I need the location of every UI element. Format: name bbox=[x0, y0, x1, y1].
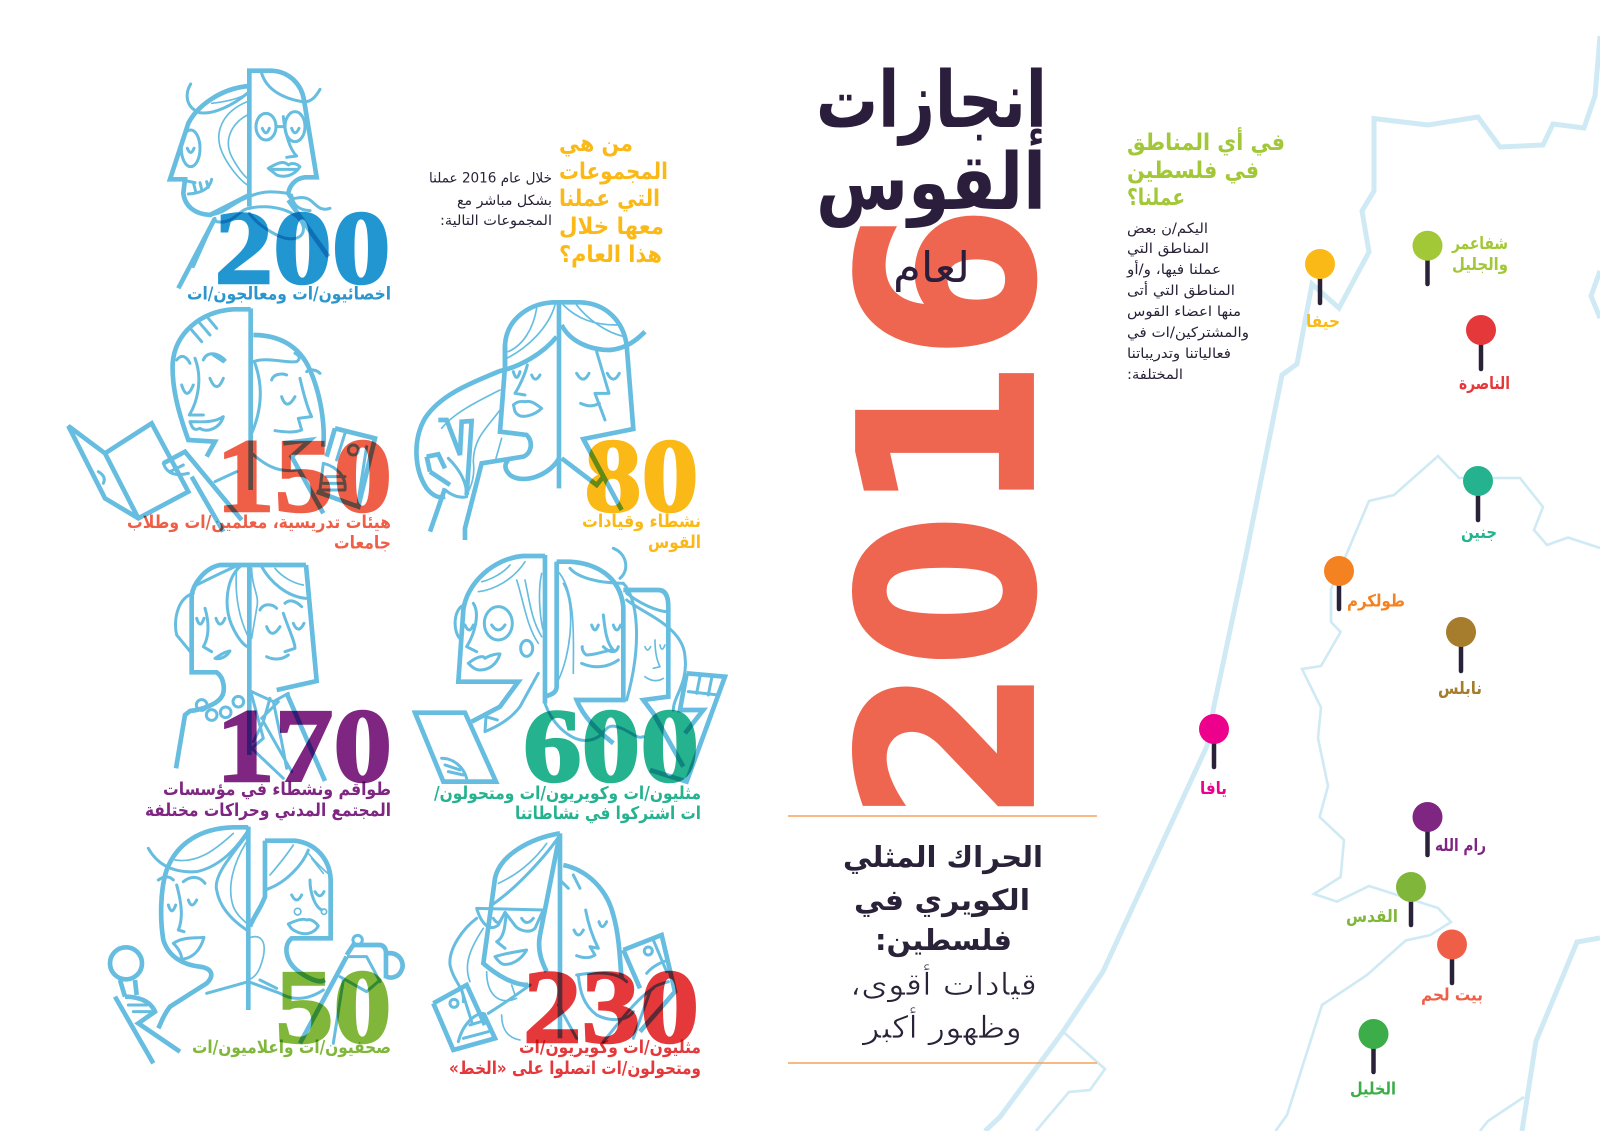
illustration: two faces with sunglasses and phones bbox=[433, 833, 675, 1050]
map of Palestine outline bbox=[985, 36, 1600, 1131]
panel: 50 journalists bbox=[110, 827, 403, 1065]
intro text: groups: المجموعات التالية: bbox=[440, 213, 552, 229]
number: 80: 80 bbox=[584, 417, 698, 534]
pin: Hebron: الخليل bbox=[1350, 1080, 1396, 1100]
number: 200: 200 bbox=[214, 189, 390, 306]
paragraph: regions intro: المختلفة: bbox=[1127, 367, 1183, 383]
pin: Shefa-Amr and Galilee: شفاعمر bbox=[1451, 234, 1508, 254]
heading: in which regions: في فلسطين bbox=[1127, 158, 1259, 184]
intro text: groups: بشكل مباشر مع bbox=[457, 193, 552, 209]
pin: Haifa bbox=[1305, 249, 1340, 332]
illustration: two faces with peace sign bbox=[416, 302, 645, 540]
label: hotline callers: مثليون/ات وكويريون/ات bbox=[519, 1038, 701, 1058]
illustration: two faces with microphone and coffee pot bbox=[110, 827, 403, 1063]
heading: in which regions: في أي المناطق bbox=[1127, 126, 1285, 156]
subtitle block: فلسطين: bbox=[875, 923, 1012, 957]
title: القوس bbox=[816, 138, 1046, 228]
number: 150: 150 bbox=[216, 417, 392, 534]
paragraph: regions intro bbox=[1126, 221, 1249, 383]
label: teaching staff: هيئات تدريسية، معلمين/ات وطلاب bbox=[127, 513, 391, 533]
number: 170: 170 bbox=[216, 687, 392, 804]
heading: who did we work with: هذا العام؟ bbox=[559, 242, 662, 268]
pin: Jerusalem: القدس bbox=[1346, 907, 1398, 927]
pin: Ramallah: رام الله bbox=[1435, 836, 1486, 856]
heading: in which regions bbox=[1127, 126, 1285, 211]
panel: 200 specialists and therapists bbox=[170, 71, 391, 306]
subtitle block: الحراك المثلي bbox=[843, 840, 1043, 874]
paragraph: regions intro: عملنا فيها، و/أو bbox=[1126, 260, 1221, 278]
subtitle block: وظهور أكبر bbox=[861, 1007, 1022, 1046]
big year 2016: 2016 bbox=[811, 206, 1089, 822]
subtitle block bbox=[788, 816, 1097, 1063]
heading: who did we work with: المجموعات bbox=[559, 159, 668, 185]
label: staff bbox=[145, 780, 391, 821]
number: 600: 600 bbox=[523, 687, 699, 804]
illustration: two faces with book and phone bbox=[68, 308, 375, 532]
pin: Ramallah bbox=[1412, 802, 1486, 856]
pin: Tulkarm bbox=[1324, 556, 1405, 612]
label: specialists: اخصائيون/ات ومعالجون/ات bbox=[187, 284, 391, 304]
paragraph: regions intro: منها اعضاء القوس bbox=[1127, 304, 1241, 320]
intro text: groups: خلال عام 2016 عملنا bbox=[429, 170, 552, 186]
label: participants: ات اشتركوا في نشاطاتنا bbox=[515, 804, 701, 824]
label: activists: نشطاء وقيادات bbox=[582, 512, 701, 532]
panel: 230 hotline callers bbox=[433, 833, 701, 1079]
pin: Jerusalem bbox=[1346, 872, 1426, 927]
label: staff: المجتمع المدني وحراكات مختلفة bbox=[145, 801, 391, 821]
pin: Jenin: جنين bbox=[1461, 523, 1497, 543]
paragraph: regions intro: المناطق التي bbox=[1127, 241, 1209, 257]
title bbox=[816, 56, 1047, 228]
illustration: two faces with glasses bbox=[170, 71, 330, 288]
label: participants: مثليون/ات وكويريون/ات ومتحولون/ bbox=[434, 784, 701, 804]
pin: Shefa-Amr and Galilee bbox=[1412, 231, 1508, 284]
panel: 80 activists and leaders bbox=[416, 302, 701, 553]
label: teaching staff: جامعات bbox=[334, 534, 391, 554]
label: activists: القوس bbox=[648, 533, 701, 553]
heading: who did we work with: من هي bbox=[559, 131, 633, 157]
pin: Hebron bbox=[1350, 1019, 1396, 1100]
intro text: groups bbox=[429, 170, 552, 229]
number: 230: 230 bbox=[523, 948, 699, 1065]
heading: who did we work with: معها خلال bbox=[559, 214, 664, 240]
pin: Bethlehem: بيت لحم bbox=[1421, 986, 1483, 1006]
number: 50: 50 bbox=[276, 948, 392, 1065]
pin: Jaffa: يافا bbox=[1200, 779, 1227, 799]
heading: in which regions: عملنا؟ bbox=[1127, 185, 1185, 211]
illustration: three faces with paper and book bbox=[415, 548, 725, 782]
panel: 170 staff and civil society activists bbox=[145, 565, 392, 821]
pin: Bethlehem bbox=[1421, 930, 1483, 1006]
pin: Nazareth bbox=[1459, 315, 1510, 394]
title suffix: for the year: لعام bbox=[893, 243, 970, 292]
paragraph: regions intro: فعالياتنا وتدريباتنا bbox=[1127, 346, 1231, 362]
pin: Haifa: حيفا bbox=[1306, 312, 1340, 332]
panel: 600 participants bbox=[415, 548, 725, 824]
pin: Shefa-Amr and Galilee: والجليل bbox=[1452, 255, 1508, 275]
label: teaching staff bbox=[127, 513, 391, 554]
paragraph: regions intro: المناطق التي أتى bbox=[1127, 281, 1235, 299]
pin: Nablus: نابلس bbox=[1438, 679, 1482, 699]
pin: Jaffa bbox=[1199, 714, 1229, 799]
label: journalists: صحفيون/ات واعلاميون/ات bbox=[192, 1038, 391, 1058]
subtitle block: قيادات أقوى، bbox=[850, 964, 1037, 1003]
label: hotline callers bbox=[449, 1038, 701, 1079]
paragraph: regions intro: اليكم/ن بعض bbox=[1127, 221, 1208, 237]
illustration: two faces with pearls and tie bbox=[176, 565, 325, 781]
pin: Jenin bbox=[1461, 466, 1497, 543]
label: participants bbox=[434, 784, 701, 824]
label: staff: طواقم ونشطاء في مؤسسات bbox=[163, 780, 391, 800]
heading: who did we work with bbox=[559, 131, 668, 268]
paragraph: regions intro: والمشتركين/ات في bbox=[1127, 325, 1249, 341]
panel: 150 teaching staff bbox=[68, 308, 392, 554]
pin: Nazareth: الناصرة bbox=[1459, 374, 1510, 394]
label: hotline callers: ومتحولون/ات اتصلوا على «الخط» bbox=[449, 1059, 701, 1079]
pin: Tulkarm: طولكرم bbox=[1347, 592, 1405, 612]
subtitle block: الكويري في bbox=[854, 883, 1030, 917]
title: إنجازات bbox=[816, 56, 1047, 147]
label: activists bbox=[582, 512, 701, 553]
pin: Nablus bbox=[1438, 617, 1482, 699]
heading: who did we work with: التي عملنا bbox=[559, 186, 660, 212]
